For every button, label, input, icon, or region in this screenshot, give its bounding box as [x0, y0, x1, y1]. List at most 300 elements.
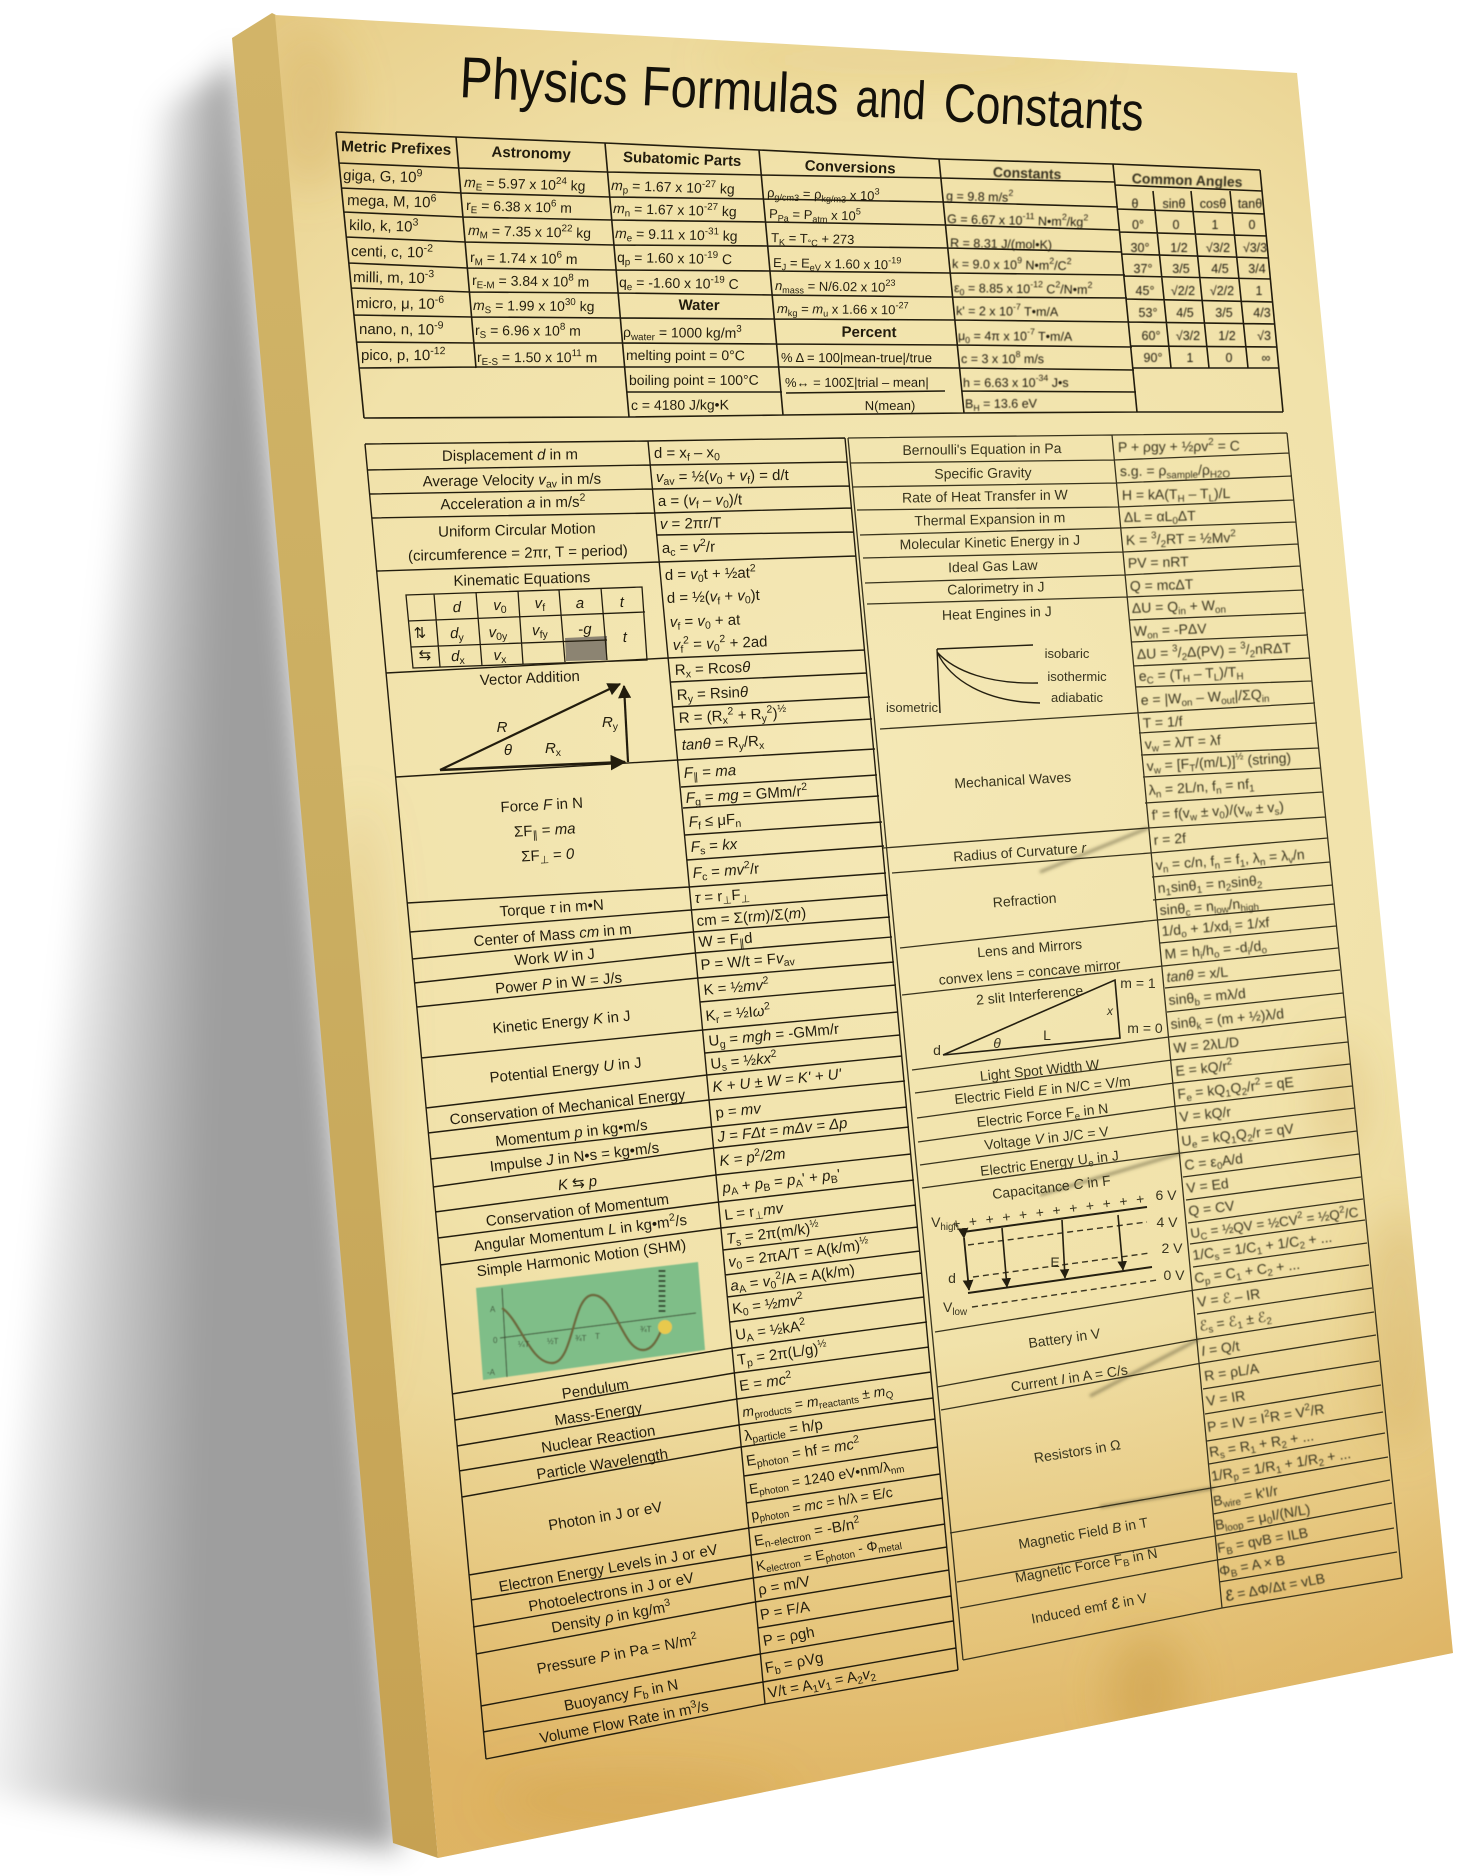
formulas column: fluids, heat, waves, optics: e = |Won – Wout|/ΣQin: [1140, 686, 1270, 711]
column: common angles: 0°: [1132, 218, 1144, 232]
capacitor field diagram: [931, 1187, 1185, 1318]
formulas column: electricity and magnetism: Bwire = k'I/r: [1212, 1482, 1280, 1512]
column: constants: h = 6.63 x 10-34 J•s: [963, 373, 1069, 390]
formulas column: mechanics: [654, 444, 870, 1395]
column: subatomic parts and water: melting point = 0°C: [626, 347, 745, 363]
capacitor field diagram: 0 V: [1163, 1267, 1185, 1283]
kinematics mini table: -g: [578, 621, 592, 638]
capacitor field diagram: 2 V: [1161, 1240, 1183, 1256]
topic labels: modern physics and fluids: Mass-Energy: [553, 1400, 644, 1429]
formulas column: mechanics: UA = ½kA2: [734, 1315, 807, 1346]
formulas column: fluids, heat, waves, optics: vw = [FT/(m/L)]½ (string): [1146, 748, 1292, 777]
title: Physics: [458, 45, 629, 118]
formulas column: mechanics: Ts = 2π(m/k)½: [725, 1217, 820, 1250]
formulas column: mechanics: W = F∥d: [698, 930, 753, 953]
topic labels: mechanics: Momentum p in kg•m/s: [495, 1117, 648, 1150]
formulas column: modern physics and fluids: Ephoton = hf = mc2: [745, 1433, 861, 1472]
column: common angles: 4/5: [1176, 306, 1194, 320]
column: common angles: 90°: [1144, 351, 1162, 365]
formulas column: mechanics: d = xf – x0: [654, 444, 720, 464]
topic labels: fluids, heat, waves, optics: Specific Gravity: [934, 464, 1032, 482]
formulas column: electricity and magnetism: Bloop = μ0I/(N/L): [1214, 1501, 1312, 1536]
simple harmonic motion chart: ¾T: [575, 1334, 587, 1343]
column: constants: G = 6.67 x 10-11 N•m2/kg2: [947, 209, 1089, 229]
column: conversions and percent: % Δ = 100|mean-true|/true: [781, 350, 932, 365]
wall shadow: [0, 42, 400, 1850]
column: constants: g = 9.8 m/s2: [946, 186, 1014, 205]
formulas column: mechanics: v0 = 2πA/T = A(k/m)½: [727, 1234, 870, 1273]
formulas column: fluids, heat, waves, optics: H = kA(TH – TL)/L: [1122, 485, 1231, 506]
topic labels: mechanics: Force F in N: [500, 795, 583, 816]
column: metric prefixes: [341, 138, 452, 364]
formulas column: fluids, heat, waves, optics: r = 2f: [1153, 830, 1187, 848]
column: common angles: 1: [1256, 284, 1263, 298]
formulas column: electricity and magnetism: Rs = R1 + R2 + ...: [1208, 1427, 1315, 1463]
formulas column: mechanics: aA = v02/A = A(k/m): [729, 1260, 856, 1297]
formulas column: fluids, heat, waves, optics: λn = 2L/n, fn = nf1: [1148, 775, 1255, 801]
formulas column: mechanics: R = (Rx2 + Ry2)½: [678, 703, 787, 729]
capacitor field diagram: 6 V: [1155, 1187, 1177, 1203]
formulas column: fluids, heat, waves, optics: tanθ = x/L: [1166, 963, 1229, 985]
column: common angles: 4/3: [1253, 306, 1271, 320]
formulas column: fluids, heat, waves, optics: M = hi/ho = -di/do: [1164, 937, 1268, 965]
topic labels: electricity and magnetism: Electric Force Fe in N: [976, 1100, 1109, 1133]
formulas column: fluids, heat, waves, optics: sinθb = mλ/d: [1168, 985, 1247, 1011]
column: common angles: θ: [1132, 197, 1139, 211]
simple harmonic motion chart: 0: [493, 1336, 498, 1345]
formulas column: mechanics: Fg = mg = GMm/r2: [685, 781, 808, 809]
formulas column: fluids, heat, waves, optics: ΔL = αL0ΔT: [1124, 507, 1196, 528]
formulas column: fluids, heat, waves, optics: sinθc = nlow/nhigh: [1159, 894, 1259, 921]
formulas column: modern physics and fluids: pphoton = mc = h/λ = E/c: [750, 1484, 894, 1526]
topic labels: electricity and magnetism: Magnetic Force FB in N: [1014, 1545, 1159, 1588]
formulas column: electricity and magnetism: FB = qvB = ILB: [1216, 1524, 1310, 1559]
column: metric prefixes: kilo, k, 103: [349, 215, 419, 236]
fold ghost bands: [1040, 828, 1214, 1507]
formulas column: modern physics and fluids: Kelectron = Ephoton - Φmetal: [755, 1533, 903, 1577]
simple harmonic motion chart: A: [490, 1305, 496, 1314]
column: common angles: √2/2: [1210, 284, 1234, 298]
capacitor field diagram: E: [1050, 1254, 1060, 1270]
simple harmonic motion chart: ½T: [547, 1337, 559, 1346]
column: conversions and percent: Conversions: [804, 157, 896, 178]
column: subatomic parts and water: mn = 1.67 x 10-27 kg: [613, 199, 737, 222]
topic labels: fluids, heat, waves, optics: Mechanical Waves: [954, 769, 1072, 791]
kinematics mini table: ⇆: [418, 647, 431, 664]
topic labels: mechanics: Acceleration a in m/s2: [440, 492, 586, 513]
topic labels: electricity and magnetism: Voltage V in J/C = V: [983, 1123, 1110, 1153]
formulas column: electricity and magnetism: V = IR: [1205, 1387, 1246, 1409]
heat engine PV curves: [886, 645, 1107, 715]
topic labels: fluids, heat, waves, optics: Bernoulli's Equation in Pa: [902, 440, 1062, 458]
topic labels: fluids, heat, waves, optics: Ideal Gas Law: [948, 557, 1039, 575]
formulas column: electricity and magnetism: C = ε0A/d: [1183, 1150, 1244, 1176]
column: metric prefixes: Metric Prefixes: [341, 138, 452, 159]
column: common angles: √3/3: [1243, 241, 1267, 255]
formulas column: modern physics and fluids: ρ = m/V: [757, 1573, 811, 1599]
capacitor field diagram: Vhigh: [931, 1214, 959, 1233]
formulas column: mechanics: vav = ½(v0 + vf) = d/t: [656, 467, 790, 488]
column: conversions and percent: N(mean): [865, 398, 915, 413]
topic labels: mechanics: Work W in J: [514, 946, 595, 969]
topic labels: fluids, heat, waves, optics: Thermal Expansion in m: [914, 509, 1066, 529]
column: common angles: cosθ: [1200, 197, 1226, 211]
title: Constants: [942, 73, 1145, 143]
topic labels: mechanics: Average Velocity vav in m/s: [423, 471, 601, 492]
formulas column: fluids, heat, waves, optics: [1118, 437, 1305, 1056]
left table grid: [365, 438, 958, 1759]
formulas column: electricity and magnetism: 1/Cs = 1/C1 + 1/C2 + ...: [1191, 1229, 1333, 1266]
column: common angles: 1: [1187, 351, 1194, 365]
formulas column: modern physics and fluids: P = ρgh: [762, 1624, 816, 1650]
column: constants: BH = 13.6 eV: [965, 397, 1038, 413]
formulas column: mechanics: Tp = 2π(L/g)½: [736, 1337, 829, 1371]
formulas column: electricity and magnetism: ℰs = ℰ1 ± ℰ2: [1198, 1308, 1273, 1337]
topic labels: electricity and magnetism: Resistors in Ω: [1033, 1436, 1122, 1466]
topic labels: mechanics: Potential Energy U in J: [489, 1054, 642, 1087]
topic labels: mechanics: Impulse J in N•s = kg•m/s: [489, 1139, 660, 1176]
formulas column: electricity and magnetism: Fe = kQ1Q2/r2 = qE: [1177, 1073, 1295, 1105]
column: subatomic parts and water: ρwater = 1000 kg/m3: [623, 323, 742, 344]
capacitor field diagram: + + + + + + + + + + + +: [951, 1190, 1148, 1232]
column: common angles: ∞: [1262, 351, 1271, 365]
column: common angles: √3/2: [1176, 329, 1200, 343]
formulas column: electricity and magnetism: E = kQ/r2: [1175, 1056, 1233, 1079]
topic labels: mechanics: ΣF∥ = ma: [514, 820, 576, 843]
column: subatomic parts and water: mp = 1.67 x 10-27 kg: [611, 176, 735, 200]
column: common angles: 45°: [1136, 284, 1154, 298]
column: astronomy: [464, 144, 597, 368]
formulas column: fluids, heat, waves, optics: f' = f(vw ± v0)/(vw ± vs): [1151, 798, 1285, 826]
two slit interference triangle: L: [1043, 1027, 1051, 1043]
formulas column: electricity and magnetism: 1/Rp = 1/R1 + 1/R2 + ...: [1210, 1445, 1352, 1487]
formulas column: modern physics and fluids: Ephoton = 1240 eV•nm/λnm: [748, 1456, 905, 1500]
topic labels: modern physics and fluids: Volume Flow Rate in m3/s: [538, 1696, 710, 1747]
kinematics mini table: vf: [534, 595, 545, 614]
topic labels: electricity and magnetism: [954, 1056, 1159, 1627]
capacitor field diagram: Vlow: [943, 1299, 968, 1318]
column: common angles: 3/5: [1215, 306, 1233, 320]
topic labels: fluids, heat, waves, optics: Radius of Curvature r: [953, 839, 1088, 865]
column: metric prefixes: nano, n, 10-9: [359, 319, 444, 339]
heat engine PV curves: isobaric: [1045, 646, 1090, 661]
formulas column: mechanics: K = ½mv2: [703, 974, 770, 999]
column: common angles: sinθ: [1163, 197, 1186, 211]
column: astronomy: mM = 7.35 x 1022 kg: [468, 221, 591, 244]
two slit interference triangle: m = 1: [1120, 975, 1156, 991]
column: constants: k' = 2 x 10-7 T•m/A: [956, 301, 1059, 319]
kinematics mini table: dx: [451, 648, 466, 667]
column: subatomic parts and water: me = 9.11 x 10-31 kg: [615, 224, 738, 247]
topic labels: fluids, heat, waves, optics: Refraction: [992, 890, 1057, 910]
topic labels: modern physics and fluids: Nuclear Reaction: [540, 1422, 656, 1457]
vector addition diagram: Rx: [545, 740, 562, 759]
aged paper stains: [270, 15, 1453, 1858]
topic labels: modern physics and fluids: Electron Energy Levels in J or eV: [498, 1541, 719, 1596]
column: subatomic parts and water: qe = -1.60 x 10-19 C: [619, 273, 739, 295]
formulas column: fluids, heat, waves, optics: PV = nRT: [1128, 553, 1189, 571]
formulas column: electricity and magnetism: [1175, 1056, 1360, 1604]
column: constants: μ0 = 4π x 10-7 T•m/A: [958, 326, 1073, 346]
topic labels: mechanics: Torque τ in m•N: [499, 896, 604, 921]
column: common angles: 37°: [1134, 262, 1152, 276]
formulas column: mechanics: K + U ± W = K' + U': [712, 1066, 843, 1096]
column: constants: k = 9.0 x 109 N•m2/C2: [952, 254, 1072, 273]
column: conversions and percent: EJ = EeV x 1.60 x 10-19: [773, 253, 901, 274]
column: subatomic parts and water: boiling point = 100°C: [629, 372, 759, 388]
panel: mechanics and modern physics table: [365, 438, 958, 1759]
formulas column: fluids, heat, waves, optics: vw = λ/T = λf: [1144, 732, 1221, 755]
formulas column: mechanics: d = v0t + ½at2: [665, 562, 756, 586]
formulas column: electricity and magnetism: V = kQ/r: [1179, 1103, 1232, 1125]
column: conversions and percent: TK = T°C + 273: [771, 230, 855, 249]
formulas column: mechanics: J = FΔt = mΔv = Δp: [716, 1115, 848, 1146]
column: common angles: 4/5: [1211, 262, 1229, 276]
formulas column: mechanics: ac = v2/r: [662, 537, 715, 559]
vector addition diagram: [440, 684, 628, 770]
kinematics mini table: ⇅: [413, 625, 426, 642]
column: common angles: 0: [1173, 218, 1180, 232]
formulas column: fluids, heat, waves, optics: T = 1/f: [1142, 713, 1183, 731]
right table grid: [848, 433, 1402, 1660]
capacitor field diagram: 4 V: [1156, 1214, 1178, 1230]
vector addition diagram: Ry: [602, 714, 619, 733]
topic labels: mechanics: (circumference = 2πr, T = period): [408, 542, 628, 565]
kinematics mini table: t: [620, 594, 625, 611]
topic labels: mechanics: Simple Harmonic Motion (SHM): [476, 1237, 687, 1280]
kinematics mini table: v0y: [488, 624, 508, 643]
canvas front face: [275, 15, 1453, 1858]
formulas column: mechanics: Fc = mv2/r: [692, 858, 760, 884]
formulas column: modern physics and fluids: [741, 1382, 905, 1704]
column: constants: [946, 164, 1093, 413]
topic labels: mechanics: K ⇆ p: [557, 1173, 598, 1194]
formulas column: mechanics: F∥ = ma: [683, 762, 737, 784]
topic labels: fluids, heat, waves, optics: convex lens = concave mirror: [938, 956, 1121, 988]
formulas column: mechanics: Ry = Rsinθ: [676, 684, 749, 706]
constants table grid: [336, 132, 1283, 418]
column: conversions and percent: Percent: [841, 324, 897, 341]
simple harmonic motion chart: [476, 1262, 705, 1380]
column: astronomy: Astronomy: [491, 144, 572, 163]
formulas column: mechanics: Fs = kx: [690, 836, 738, 858]
formulas column: electricity and magnetism: I = Q/t: [1200, 1338, 1241, 1359]
formulas column: mechanics: L = r⊥mv: [723, 1200, 786, 1226]
canvas side edge: [232, 13, 438, 1858]
formulas column: electricity and magnetism: ℰ = ΔΦ/Δt = vLB: [1224, 1570, 1326, 1604]
kinematics mini table: v0: [493, 597, 507, 616]
topic labels: modern physics and fluids: Particle Wavelength: [535, 1446, 669, 1483]
formulas column: fluids, heat, waves, optics: K = 3/2RT = ½Mv2: [1126, 528, 1236, 551]
column: conversions and percent: [767, 157, 932, 413]
column: metric prefixes: giga, G, 109: [343, 165, 423, 186]
topic labels: electricity and magnetism: Induced emf ℰ in V: [1030, 1589, 1149, 1627]
title: Formulas: [640, 54, 840, 127]
column: common angles: 60°: [1142, 329, 1160, 343]
column: common angles: 1/2: [1218, 329, 1236, 343]
column: metric prefixes: micro, μ, 10-6: [356, 293, 444, 313]
formulas column: mechanics: Rx = Rcosθ: [674, 659, 751, 681]
column: common angles: 1/2: [1170, 241, 1188, 255]
formulas column: fluids, heat, waves, optics: 1/do + 1/xdi = 1/xf: [1161, 914, 1270, 942]
column: common angles: √3: [1257, 329, 1271, 343]
column: metric prefixes: milli, m, 10-3: [353, 267, 434, 287]
formulas column: mechanics: Us = ½kx2: [710, 1048, 778, 1075]
column: constants: ε0 = 8.85 x 10-12 C2/N•m2: [954, 278, 1093, 299]
topic labels: electricity and magnetism: Capacitance C in F: [991, 1172, 1111, 1202]
topic labels: fluids, heat, waves, optics: Rate of Heat Transfer in W: [902, 486, 1069, 506]
formulas column: mechanics: v = 2πr/T: [660, 515, 722, 533]
two slit interference triangle: m = 0: [1127, 1020, 1163, 1036]
simple harmonic motion chart: -A: [487, 1368, 496, 1377]
kinematics mini table: d: [452, 599, 462, 616]
kinematics mini table: a: [575, 595, 584, 612]
formulas column: mechanics: vf2 = v02 + 2ad: [672, 631, 768, 656]
kinematics mini table: vfy: [532, 622, 549, 641]
column: common angles: tanθ: [1238, 197, 1262, 211]
formulas column: electricity and magnetism: R = ρL/A: [1203, 1360, 1261, 1384]
capacitor field diagram: d: [948, 1270, 956, 1286]
topic labels: modern physics and fluids: Photoelectrons in J or eV: [527, 1570, 695, 1615]
column: astronomy: mS = 1.99 x 1030 kg: [473, 296, 595, 317]
topic labels: mechanics: Conservation of Momentum: [485, 1191, 670, 1230]
topic labels: fluids, heat, waves, optics: Lens and Mirrors: [977, 936, 1083, 960]
formulas column: mechanics: Kr = ½Iω2: [705, 1000, 771, 1027]
formulas column: electricity and magnetism: ΦB = A × B: [1218, 1551, 1287, 1582]
column: common angles: 30°: [1131, 241, 1149, 255]
column: conversions and percent: ρg/cm3 = ρkg/m3 x 103: [767, 183, 880, 206]
formulas column: electricity and magnetism: P = IV = I2R = V2/R: [1206, 1400, 1325, 1435]
column: constants: c = 3 x 108 m/s: [961, 349, 1044, 366]
column: astronomy: rE = 6.38 x 106 m: [466, 196, 572, 219]
formulas column: mechanics: τ = r⊥F⊥: [694, 886, 750, 909]
column: metric prefixes: mega, M, 106: [347, 190, 437, 211]
formulas column: modern physics and fluids: mproducts = mreactants ± mQ: [741, 1382, 895, 1423]
two slit interference triangle: x: [1106, 1004, 1114, 1018]
topic labels: fluids, heat, waves, optics: Calorimetry in J: [947, 578, 1045, 598]
formulas column: fluids, heat, waves, optics: ΔU = 3/2Δ(PV) = 3/2nRΔT: [1136, 639, 1292, 665]
topic labels: mechanics: Kinetic Energy K in J: [492, 1008, 631, 1037]
formulas column: fluids, heat, waves, optics: ΔU = Qin + Won: [1132, 597, 1226, 619]
column: astronomy: rE-S = 1.50 x 1011 m: [477, 348, 597, 368]
formulas column: fluids, heat, waves, optics: P + ρgy + ½ρv2 = C: [1118, 437, 1240, 455]
topic labels: mechanics: Uniform Circular Motion: [438, 520, 596, 541]
topic labels: modern physics and fluids: Pressure P in Pa = N/m2: [535, 1629, 699, 1678]
kinematics mini table: t: [623, 629, 628, 646]
kinematics mini table: [406, 587, 647, 668]
topic labels: fluids, heat, waves, optics: [899, 440, 1121, 1008]
topic labels: electricity and magnetism: Magnetic Field B in T: [1017, 1514, 1150, 1552]
topic labels: fluids, heat, waves, optics: Molecular Kinetic Energy in J: [899, 532, 1080, 552]
column: astronomy: rE-M = 3.84 x 108 m: [472, 271, 589, 293]
formulas column: electricity and magnetism: Q = CV: [1187, 1197, 1236, 1219]
formulas column: modern physics and fluids: λparticle = h/p: [743, 1416, 824, 1447]
column: astronomy: rS = 6.96 x 108 m: [475, 321, 581, 342]
formulas column: mechanics: Ug = mgh = -GMm/r: [708, 1021, 840, 1052]
kinematics mini table: dy: [450, 625, 465, 644]
column: common angles: 3/5: [1172, 262, 1190, 276]
topic labels: mechanics: [408, 446, 688, 1280]
column: subatomic parts and water: Subatomic Parts: [623, 149, 742, 170]
formulas column: mechanics: p = mv: [715, 1100, 763, 1122]
column: subatomic parts and water: Water: [678, 297, 720, 314]
column: common angles: √3/2: [1206, 241, 1230, 255]
topic labels: fluids, heat, waves, optics: 2 slit Interference: [975, 982, 1084, 1008]
topic labels: mechanics: ΣF⊥ = 0: [521, 846, 575, 867]
topic labels: modern physics and fluids: Photon in J or eV: [547, 1499, 663, 1534]
panel: constants table: [336, 132, 1283, 418]
topic labels: modern physics and fluids: Density ρ in kg/m3: [550, 1596, 672, 1637]
formulas column: mechanics: Ff ≤ μFn: [688, 811, 742, 833]
topic labels: electricity and magnetism: Current I in A = C/s: [1010, 1362, 1129, 1395]
column: subatomic parts and water: [611, 149, 759, 413]
column: subatomic parts and water: c = 4180 J/kg•K: [631, 396, 730, 413]
formulas column: mechanics: P = W/t = Fvav: [700, 949, 796, 976]
topic labels: electricity and magnetism: Battery in V: [1027, 1325, 1102, 1351]
two slit interference triangle: d: [933, 1042, 941, 1058]
formulas column: mechanics: K0 = ½mv2: [731, 1290, 805, 1320]
heat engine PV curves: isothermic: [1047, 669, 1107, 684]
topic labels: mechanics: Conservation of Mechanical Energy: [449, 1086, 687, 1129]
heat engine PV curves: adiabatic: [1051, 690, 1104, 705]
column: conversions and percent: PPa = Patm x 105: [769, 204, 861, 226]
topic labels: electricity and magnetism: Light Spot Width W: [979, 1056, 1101, 1084]
column: common angles: Common Angles: [1132, 170, 1243, 190]
column: common angles: 53°: [1139, 306, 1157, 320]
column: astronomy: rM = 1.74 x 106 m: [470, 248, 578, 270]
simple harmonic motion chart: ¼T: [518, 1340, 530, 1349]
column: common angles: [1131, 170, 1271, 365]
formulas column: fluids, heat, waves, optics: Q = mcΔT: [1130, 576, 1194, 594]
kinematics mini table: vx: [493, 647, 507, 666]
topic labels: modern physics and fluids: Pendulum: [561, 1376, 630, 1403]
two slit interference triangle: θ: [993, 1035, 1001, 1051]
formulas column: electricity and magnetism: UC = ½QV = ½CV2 = ½Q2/C: [1189, 1203, 1360, 1244]
simple harmonic motion chart: T: [595, 1332, 600, 1341]
topic labels: mechanics: Vector Addition: [479, 668, 580, 689]
topic labels: modern physics and fluids: Buoyancy Fb in N: [563, 1676, 680, 1717]
column: conversions and percent: nmass = N/6.02 x 1023: [775, 276, 896, 297]
topic labels: fluids, heat, waves, optics: Heat Engines in J: [942, 603, 1052, 623]
formulas column: modern physics and fluids: P = F/A: [759, 1598, 811, 1624]
column: common angles: 0: [1249, 218, 1256, 232]
topic labels: mechanics: Angular Momentum L in kg•m2/s: [473, 1210, 688, 1255]
column: common angles: √2/2: [1171, 284, 1195, 298]
two slit interference triangle: [933, 975, 1163, 1058]
formulas column: fluids, heat, waves, optics: eC = (TH – TL)/TH: [1138, 663, 1244, 687]
topic labels: mechanics: Center of Mass cm in m: [473, 921, 632, 950]
formulas column: mechanics: a = (vf – v0)/t: [658, 491, 743, 512]
column: conversions and percent: mkg = mu x 1.66 x 10-27: [777, 299, 909, 319]
column: astronomy: mE = 5.97 x 1024 kg: [464, 173, 586, 197]
formulas column: mechanics: tanθ = Ry/Rx: [681, 733, 765, 756]
formulas column: mechanics: E = mc2: [738, 1368, 793, 1395]
formulas column: mechanics: vf = v0 + at: [670, 612, 741, 633]
formulas column: fluids, heat, waves, optics: vn = c/n, fn = f1, λn = λv/n: [1155, 846, 1305, 876]
column: constants: R = 8.31 J/(mol•K): [950, 236, 1052, 252]
column: common angles: 1: [1212, 218, 1219, 232]
topic labels: electricity and magnetism: Electric Energy Ue in J: [979, 1147, 1120, 1182]
column: common angles: 3/4: [1248, 262, 1266, 276]
formulas column: fluids, heat, waves, optics: s.g. = ρsample/ρH2O: [1120, 461, 1231, 482]
column: subatomic parts and water: qp = 1.60 x 10-19 C: [617, 248, 732, 270]
formulas column: electricity and magnetism: Ue = kQ1Q2/r = qV: [1181, 1120, 1295, 1152]
formulas column: modern physics and fluids: Fb = ρVg: [764, 1649, 825, 1679]
topic labels: electricity and magnetism: Electric Field E in N/C = V/m: [954, 1073, 1131, 1107]
vector addition diagram: R: [497, 719, 508, 736]
formulas column: mechanics: d = ½(vf + v0)t: [667, 587, 761, 609]
formulas column: modern physics and fluids: V/t = A1v1 = A2v2: [767, 1665, 878, 1704]
